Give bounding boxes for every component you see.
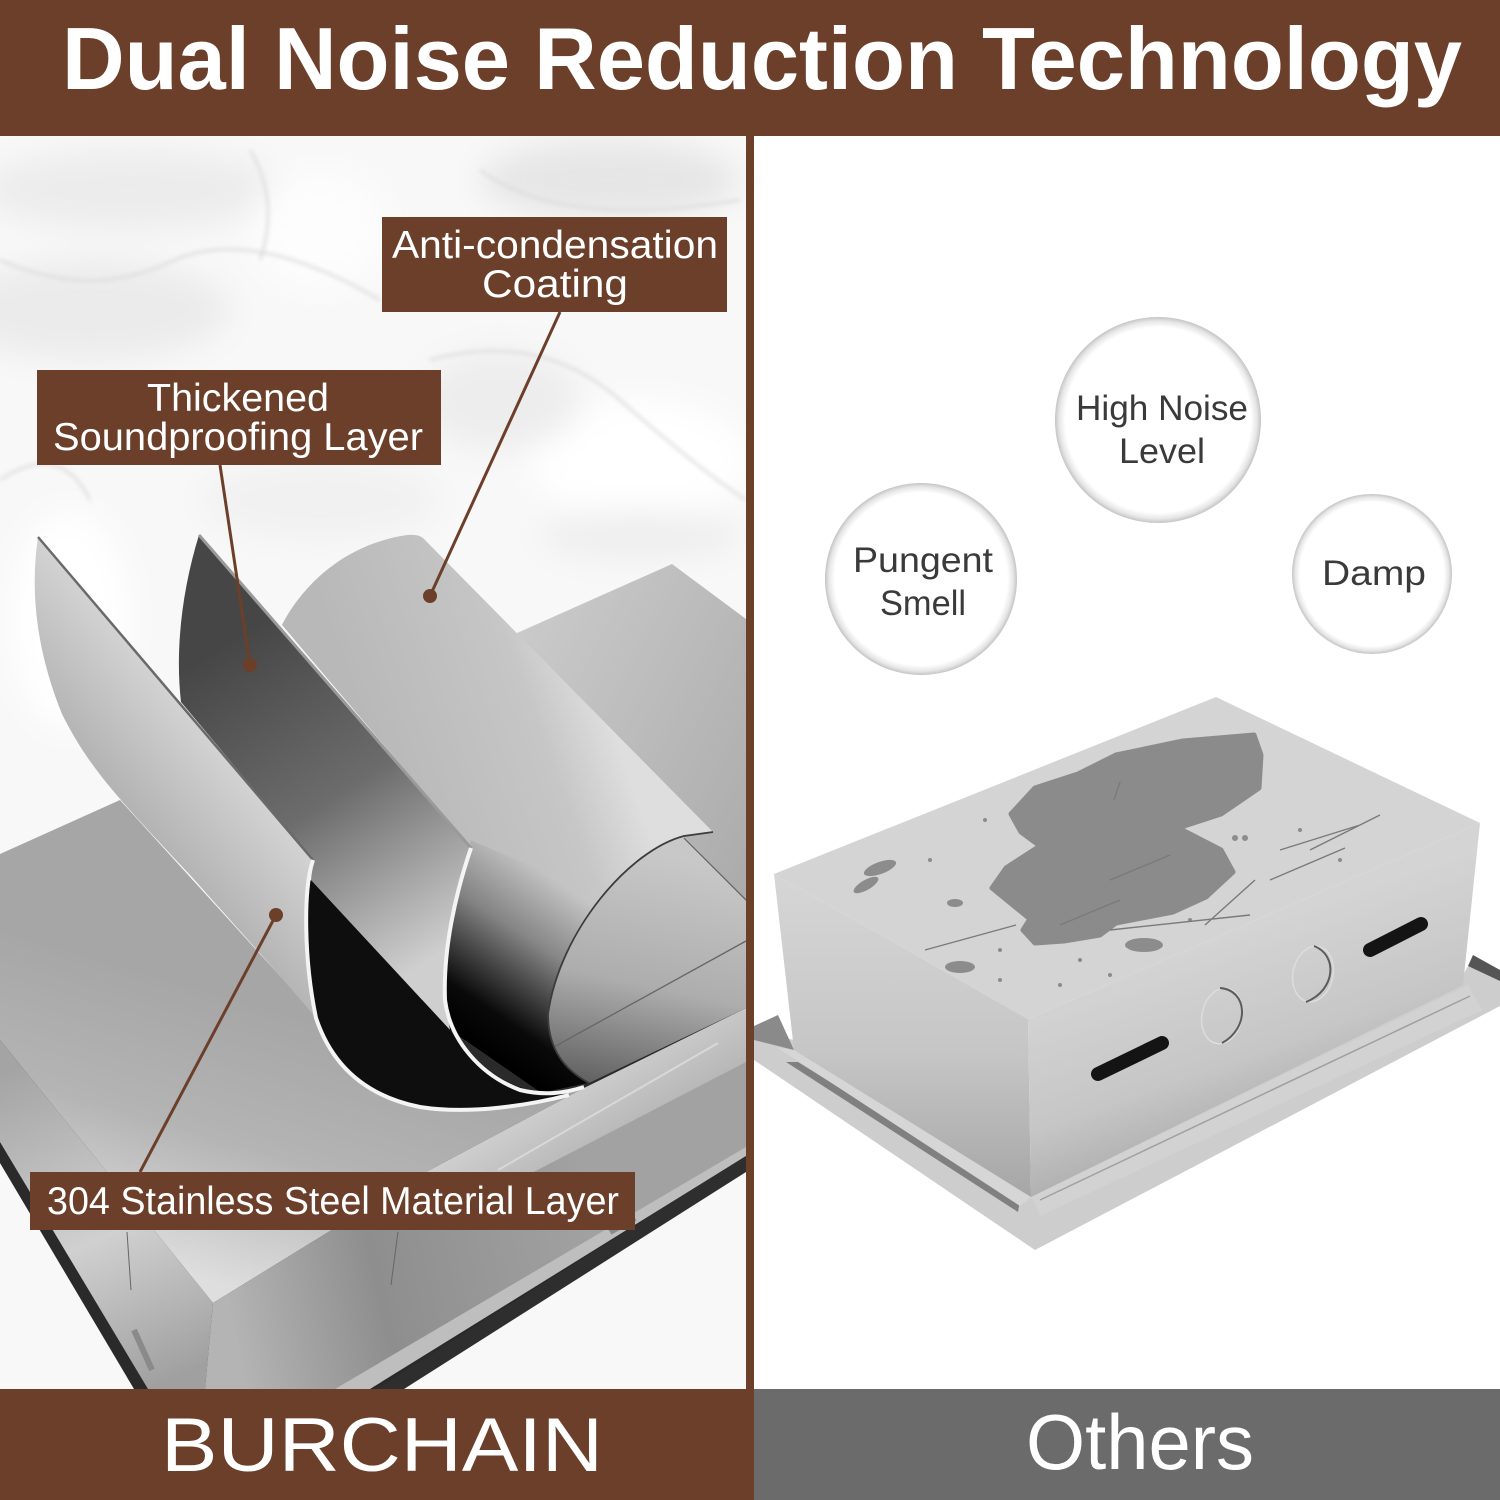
callout: Anti-condensation Coating bbox=[382, 217, 727, 603]
callout: Anti-condensation Coating: Coating bbox=[482, 263, 628, 306]
callout: 304 Stainless Steel Material Layer bbox=[30, 908, 635, 1230]
title banner bbox=[0, 0, 1500, 136]
bubble: Pungent Smell: Smell bbox=[880, 584, 966, 623]
sink lower wall bbox=[205, 1050, 746, 1389]
bubble: High Noise Level: Level bbox=[1119, 432, 1205, 471]
scratches and clips bbox=[127, 1232, 398, 1290]
panel: Others box bbox=[754, 697, 1500, 1250]
center divider bbox=[746, 136, 754, 1389]
footer: BURCHAIN: BURCHAIN bbox=[161, 1403, 603, 1488]
panel: BURCHAIN sink with layers bbox=[0, 136, 750, 1389]
back box of the sink bbox=[517, 564, 746, 1010]
box right face bbox=[1028, 823, 1480, 1197]
stain spatter bbox=[851, 818, 1342, 987]
lower light sheet: stainless layer bbox=[35, 537, 316, 1018]
black underside bbox=[306, 880, 570, 1109]
bubble: High Noise Level: High Noise bbox=[1076, 389, 1248, 428]
middle dark sheet: soundproofing layer bbox=[179, 535, 471, 1030]
marble background bbox=[0, 136, 750, 1389]
upper sheet: anti-condensation coating bbox=[282, 535, 713, 1093]
water stain bbox=[992, 735, 1261, 943]
callout: Thickened Soundproofing Layer: Soundproofing Layer bbox=[53, 416, 423, 459]
bubble: Pungent Smell bbox=[825, 483, 1017, 675]
sink left wall bbox=[0, 1040, 213, 1389]
title banner: Dual Noise Reduction Technology bbox=[62, 9, 1462, 108]
scratches bbox=[925, 782, 1380, 950]
callout: Thickened Soundproofing Layer bbox=[37, 370, 441, 672]
flange front plate bbox=[1031, 985, 1482, 1216]
sink floor bbox=[0, 800, 584, 1303]
box top bbox=[774, 697, 1480, 1019]
sink rim band bbox=[426, 1008, 746, 1205]
slot left bbox=[1098, 1043, 1162, 1074]
panel: right background bbox=[754, 136, 1500, 1389]
dark rim strip right bbox=[376, 1156, 746, 1389]
box left face bbox=[774, 874, 1031, 1197]
bubble: Damp: Damp bbox=[1322, 554, 1426, 593]
bubble: High Noise Level bbox=[1055, 317, 1261, 523]
flange dark right edge bbox=[1468, 955, 1500, 981]
bubble: Pungent Smell: Pungent bbox=[853, 541, 993, 580]
flange outer lip bbox=[754, 966, 1500, 1250]
callout: Anti-condensation Coating: Anti-condensation bbox=[392, 224, 718, 267]
flange dark corner bbox=[754, 1015, 794, 1050]
slot right bbox=[1370, 924, 1421, 950]
callout: 304 Stainless Steel Material Layer: 304 Stainless Steel Material Layer bbox=[47, 1180, 619, 1223]
roll interior bbox=[548, 836, 746, 1083]
footer: BURCHAIN bbox=[0, 1389, 754, 1500]
bubble: Damp bbox=[1292, 494, 1452, 654]
sink base: black rim bbox=[0, 1000, 746, 1389]
footer: Others: Others bbox=[1026, 1398, 1254, 1486]
flange dark channel bbox=[786, 1062, 1020, 1212]
flange inner plate bbox=[778, 1048, 1031, 1206]
footer: Others bbox=[754, 1389, 1500, 1500]
knockouts bbox=[1197, 942, 1338, 1048]
callout: Thickened Soundproofing Layer: Thickened bbox=[147, 377, 329, 420]
